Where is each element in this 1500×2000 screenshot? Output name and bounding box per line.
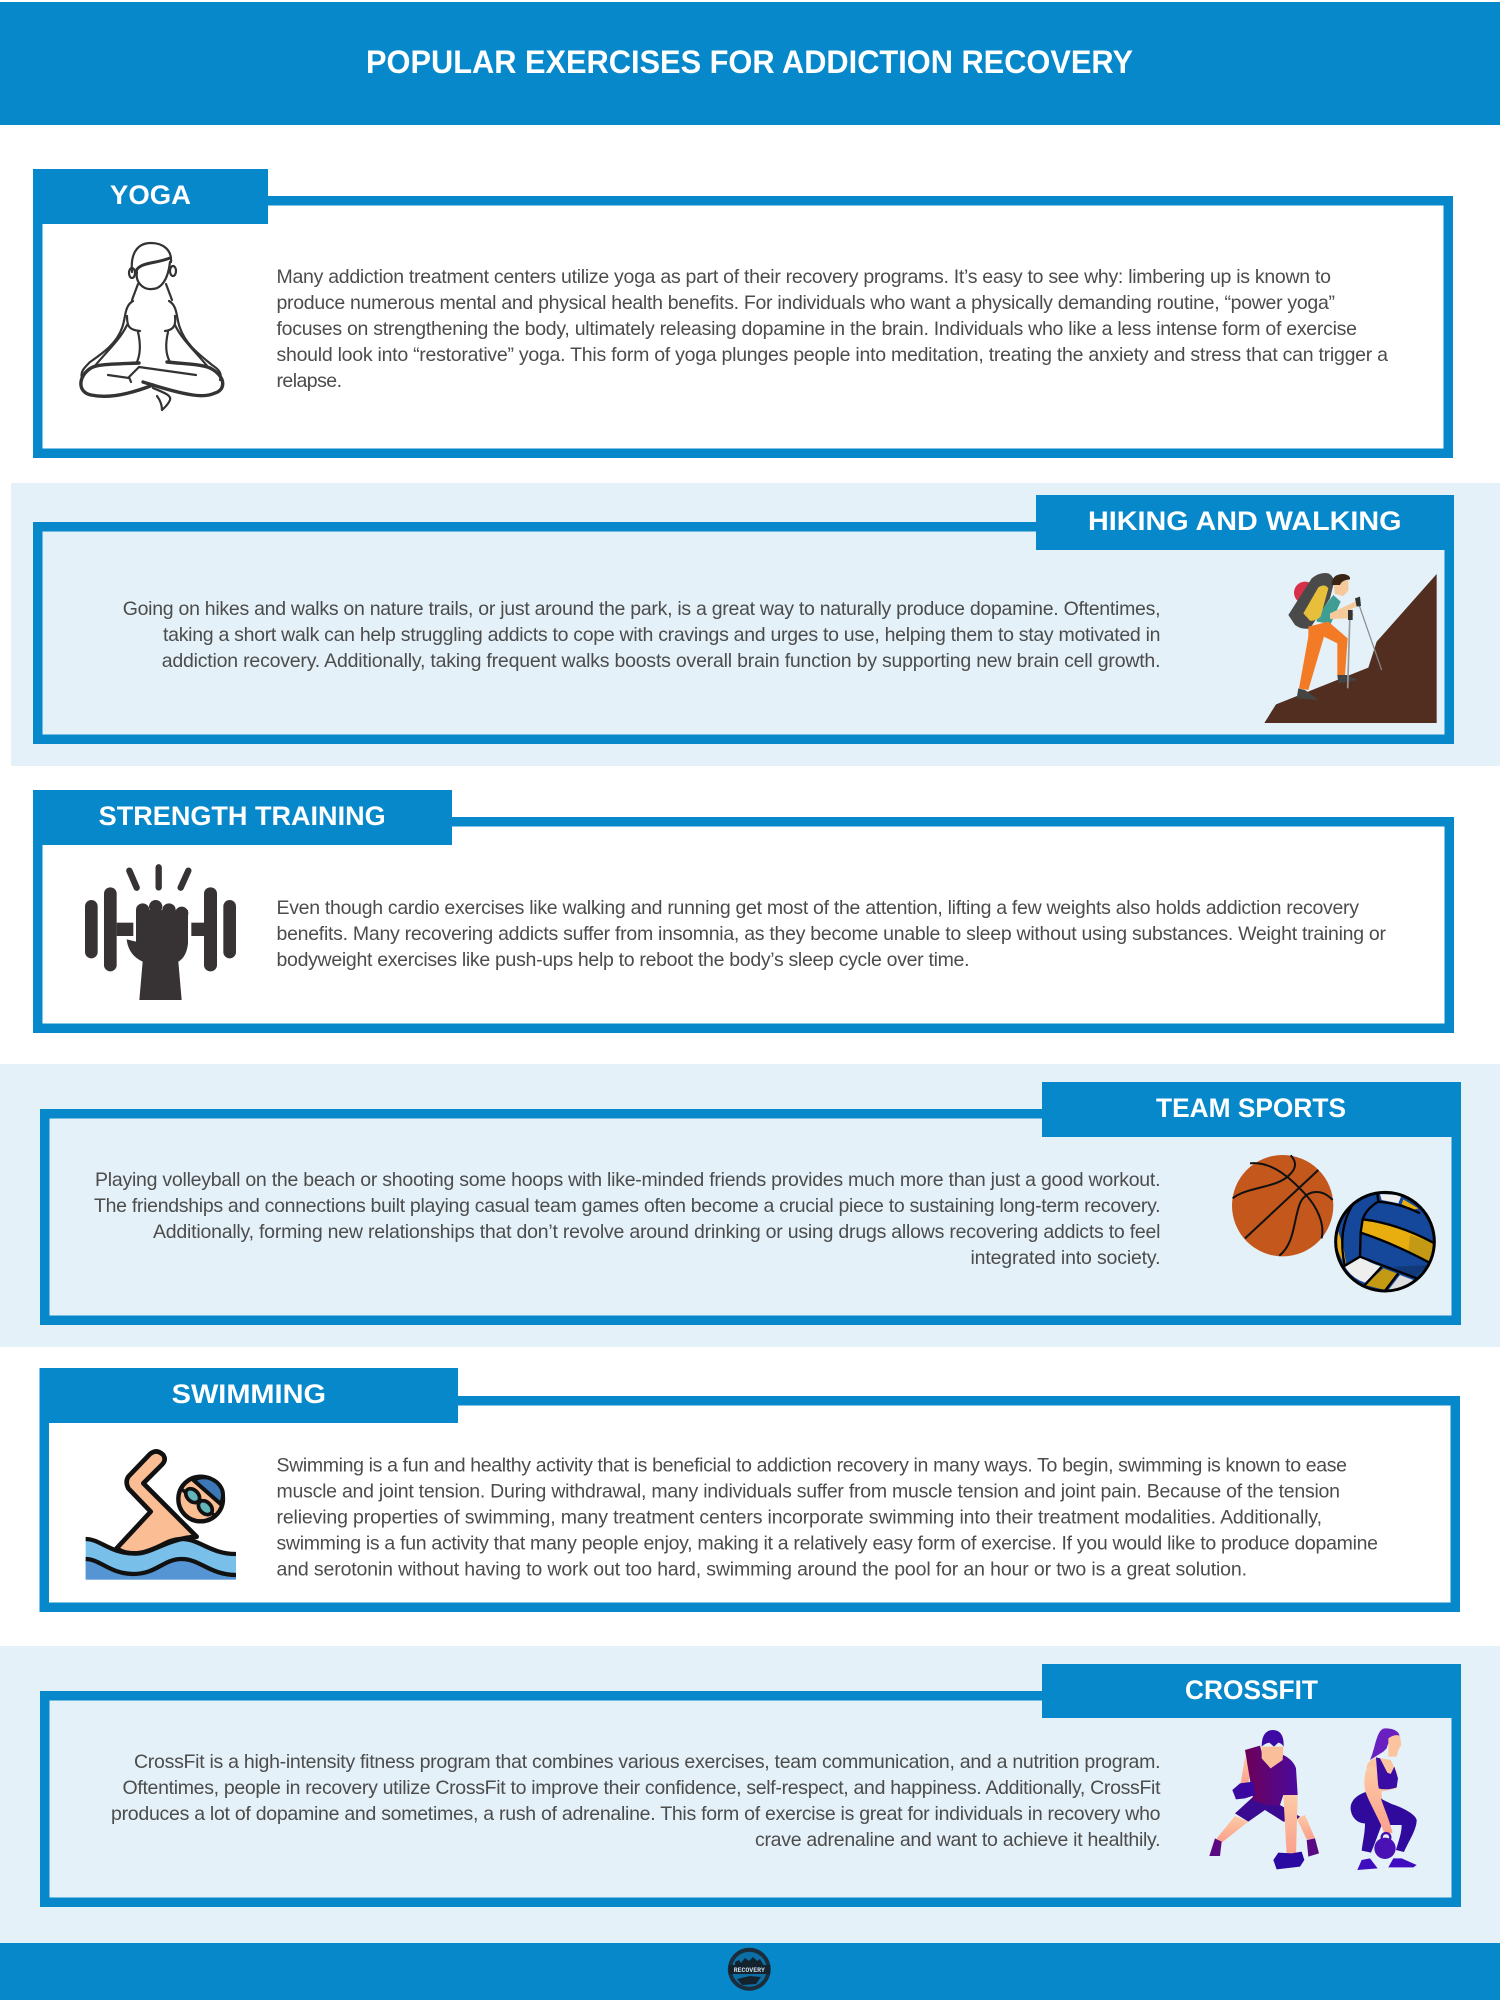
text: swimming description: Swimming is a fun and healthy activity that is beneficial to addiction recovery in many ways. To begin, swimming is known to ease xyxy=(276,1454,1347,1476)
icon: man lifting dumbbells xyxy=(1209,1730,1319,1869)
icon: woman lifting kettlebell xyxy=(1351,1728,1417,1870)
text: swimming description: and serotonin without having to work out too hard, swimming around the pool for an hour or two is a great solution. xyxy=(276,1558,1247,1580)
background band: crossfit xyxy=(0,1646,1500,1943)
text: hiking description: Going on hikes and walks on nature trails, or just around the park, is a great way to naturally produce dopamine. Oftentimes, xyxy=(123,598,1161,620)
text: yoga description: Many addiction treatment centers utilize yoga as part of their recovery programs. It’s easy to see why: limbering up is known to xyxy=(276,266,1331,288)
icon: swimmer xyxy=(86,1451,236,1580)
heading tab: swimming xyxy=(40,1368,458,1423)
text: team sports description: The friendships and connections built playing casual team games often become a crucial piece to sustaining long-term recovery. xyxy=(94,1195,1160,1217)
text: yoga description: should look into “restorative” yoga. This form of yoga plunges people into meditation, treating the anxiety and stress that can trigger a xyxy=(276,344,1388,366)
heading tab: crossfit: CROSSFIT xyxy=(1185,1675,1318,1705)
heading tab: hiking and walking: HIKING AND WALKING xyxy=(1088,506,1402,536)
panel: swimming xyxy=(40,1368,1455,1607)
heading tab: strength training: STRENGTH TRAINING xyxy=(99,801,386,831)
text: yoga description: produce numerous mental and physical health benefits. For individuals who want a physically demanding routine, “power yoga” xyxy=(276,292,1335,314)
heading tab: strength training xyxy=(33,790,452,845)
text: swimming description: swimming is a fun activity that many people enjoy, making it a relatively easy form of exercise. If you would like to produce dopamine xyxy=(276,1532,1378,1554)
text: crossfit description: produces a lot of dopamine and sometimes, a rush of adrenaline. This form of exercise is great for individuals in recovery who xyxy=(111,1803,1161,1825)
logo: recovery badge: RECOVERY xyxy=(734,1967,765,1974)
text: strength description: Even though cardio exercises like walking and running get most of the attention, lifting a few weights also holds addiction recovery xyxy=(276,897,1359,919)
heading tab: team sports: TEAM SPORTS xyxy=(1156,1093,1346,1123)
heading tab: crossfit xyxy=(1042,1664,1461,1718)
text: yoga description xyxy=(276,266,1388,392)
text: strength description: bodyweight exercises like push-ups help to reboot the body’s sleep cycle over time. xyxy=(276,949,970,971)
text: team sports description: integrated into society. xyxy=(970,1247,1160,1269)
footer bar xyxy=(0,1943,1500,2000)
heading tab: swimming: SWIMMING xyxy=(172,1379,326,1409)
text: crossfit description: CrossFit is a high-intensity fitness program that combines various exercises, team communication, and a nutrition program. xyxy=(134,1751,1160,1773)
icon: basketball and volleyball xyxy=(1232,1155,1434,1291)
text: crossfit description: Oftentimes, people in recovery utilize CrossFit to improve their confidence, self-respect, and happiness. Additionally, CrossFit xyxy=(122,1777,1161,1799)
logo: recovery badge xyxy=(728,1948,771,1991)
text: hiking description: taking a short walk can help struggling addicts to cope with cravings and urges to use, helping them to stay motivated in xyxy=(163,624,1160,646)
heading tab: hiking and walking xyxy=(1036,495,1454,550)
panel: crossfit xyxy=(45,1664,1461,1902)
text: swimming description xyxy=(276,1454,1378,1580)
text: crossfit description: crave adrenaline and want to achieve it healthily. xyxy=(755,1829,1160,1851)
text: team sports description xyxy=(94,1169,1160,1269)
text: swimming description: muscle and joint tension. During withdrawal, many individuals suffer from muscle tension and joint pain. Because of the tension xyxy=(276,1480,1340,1502)
icon: fist holding dumbbell xyxy=(85,867,236,1000)
background band: hiking xyxy=(11,483,1500,766)
text: hiking description xyxy=(123,598,1161,672)
panel: strength training xyxy=(33,790,1449,1028)
text: yoga description: relapse. xyxy=(276,370,342,392)
panel: hiking and walking xyxy=(38,495,1454,739)
icon: meditating person xyxy=(81,243,223,410)
background band: team sports xyxy=(0,1064,1500,1347)
heading tab: yoga: YOGA xyxy=(110,180,191,210)
text: strength description: benefits. Many recovering addicts suffer from insomnia, as they become unable to sleep without using substances. Weight training or xyxy=(276,923,1386,945)
panel: team sports xyxy=(45,1082,1461,1320)
text: team sports description: Additionally, forming new relationships that don’t revolve around drinking or using drugs allows recovering addicts to feel xyxy=(153,1221,1160,1243)
text: hiking description: addiction recovery. Additionally, taking frequent walks boosts overall brain function by supporting new brain cell growth. xyxy=(162,650,1160,672)
title banner xyxy=(0,2,1500,125)
icon: hiker on mountain xyxy=(1264,573,1437,723)
heading tab: yoga xyxy=(33,169,268,224)
title: POPULAR EXERCISES FOR ADDICTION RECOVERY xyxy=(366,44,1133,80)
text: crossfit description xyxy=(111,1751,1161,1851)
text: yoga description: focuses on strengthening the body, ultimately releasing dopamine in the brain. Individuals who like a less intense form of exercise xyxy=(276,318,1357,340)
text: swimming description: relieving properties of swimming, many treatment centers incorporate swimming into their treatment modalities. Additionally, xyxy=(276,1506,1322,1528)
panel: yoga xyxy=(33,169,1448,453)
heading tab: team sports xyxy=(1042,1082,1461,1137)
text: team sports description: Playing volleyball on the beach or shooting some hoops with like-minded friends provides much more than just a good workout. xyxy=(95,1169,1160,1191)
text: strength description xyxy=(276,897,1386,971)
